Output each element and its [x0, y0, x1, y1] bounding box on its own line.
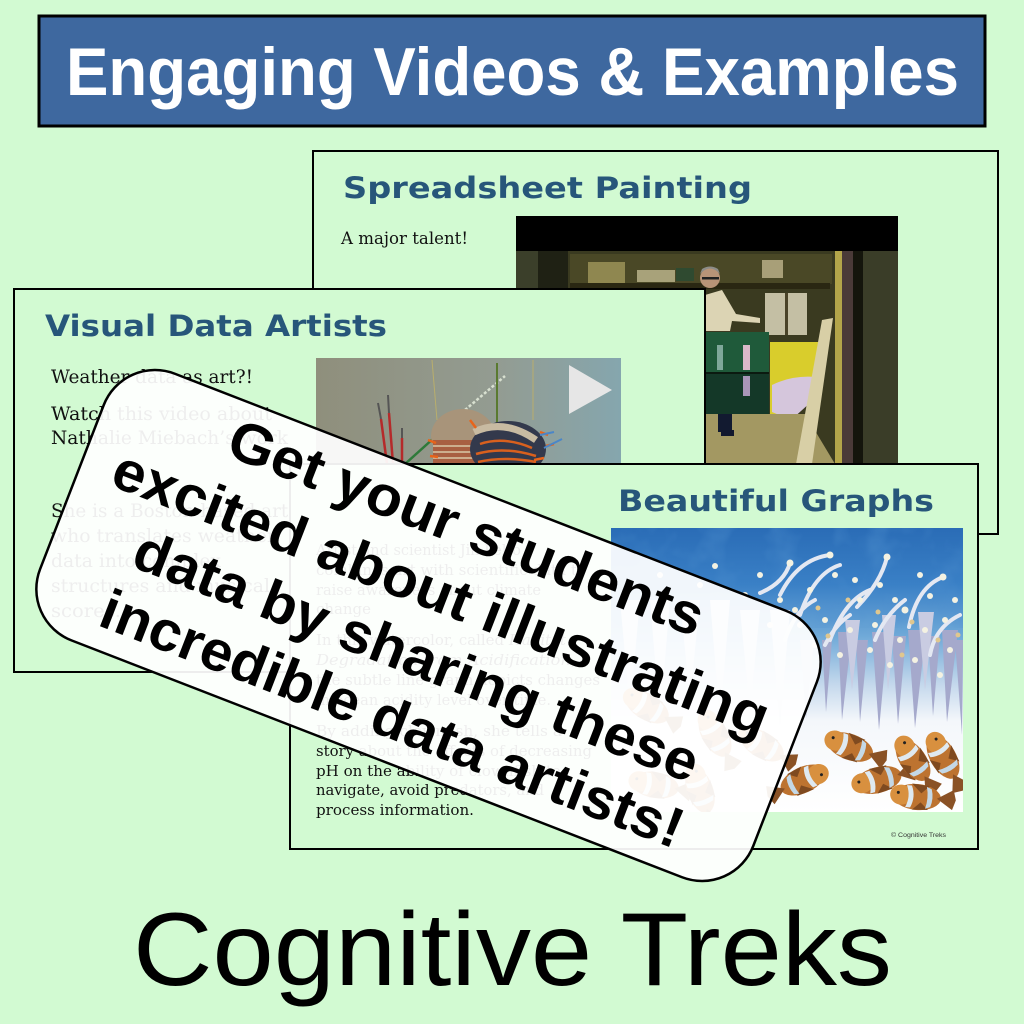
copyright: © Cognitive Treks — [891, 831, 947, 839]
slide body text: in ocean acidity level over time. — [316, 691, 551, 709]
video still: woven sculpture — [316, 358, 621, 463]
slide body text: the subtle line graph depicts changes — [316, 671, 600, 689]
slide body text: raise awareness about climate — [316, 581, 541, 599]
slide body text — [315, 541, 600, 819]
brand name: Cognitive Treks — [133, 892, 892, 1008]
slide body text: story about the effects of decreasing — [316, 742, 592, 760]
slide body text: combines art with scientific data to — [316, 561, 586, 579]
slide body text: In this watercolor, called Habitat — [316, 631, 567, 649]
panel: Beautiful Graphs slide — [290, 464, 978, 849]
slide body text: data into complex — [51, 551, 222, 572]
photo: painter in studio — [516, 216, 898, 464]
slide body text: Watch this video about — [51, 404, 273, 425]
callout text: Get your students — [219, 407, 713, 649]
slide body text: Artist and scientist Jill Pelto — [315, 541, 521, 559]
slide body text: scores. — [51, 601, 121, 622]
callout text — [55, 372, 804, 875]
callout banner — [20, 354, 837, 897]
slide text: A major talent! — [340, 229, 468, 248]
slide body text: She is a Boston-based artist — [51, 501, 312, 522]
title: Engaging Videos & Examples — [66, 34, 959, 110]
slide body text: who translates weather — [51, 526, 276, 547]
slide body text: Nathalie Miebach’s work — [51, 428, 289, 449]
callout text: data by sharing these — [125, 518, 708, 795]
slide body text: process information. — [316, 801, 474, 819]
slide body text: pH on the ability of clownfish to — [316, 762, 561, 780]
slide body text — [51, 367, 312, 622]
slide body text: Weather data as art?! — [51, 367, 253, 388]
callout text: excited about illustrating — [104, 437, 778, 750]
slide heading: Spreadsheet Painting — [343, 171, 752, 205]
slide body text: Degradation from Acidification, — [315, 651, 576, 669]
panel: Spreadsheet Painting slide — [313, 151, 998, 534]
slide body text: change — [316, 600, 371, 618]
watercolor: graph of anemones and clownfish — [611, 528, 974, 831]
clownfish group — [623, 688, 963, 812]
callout text: incredible data artists! — [92, 577, 693, 861]
icon: play button — [569, 365, 612, 414]
slide body text: structures and musical — [51, 576, 270, 597]
title banner — [39, 16, 985, 126]
panel: Visual Data Artists slide — [14, 289, 705, 672]
slide body text: By adding clownfish, she tells a — [316, 722, 562, 740]
slide heading: Visual Data Artists — [45, 309, 387, 343]
slide body text: navigate, avoid predators, and — [316, 781, 544, 799]
slide heading: Beautiful Graphs — [618, 484, 934, 518]
